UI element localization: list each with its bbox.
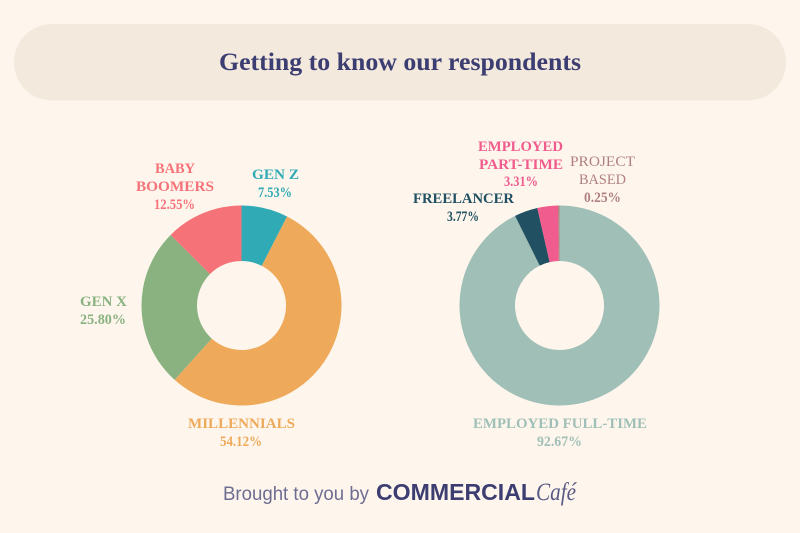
label: Freelancer xyxy=(413,191,514,225)
label: Employed part-time xyxy=(478,139,563,190)
label: Employed full-time: EMPLOYED FULL-TIME xyxy=(473,416,647,432)
donut chart: employment xyxy=(459,205,659,406)
logo: CommercialCafé: COMMERCIAL xyxy=(376,479,535,505)
label: Employed full-time xyxy=(473,416,647,450)
slice: Baby Boomers xyxy=(171,206,242,274)
label: Employed part-time: 3.31% xyxy=(504,174,538,190)
label: Baby Boomers: BOOMERS xyxy=(136,179,214,195)
title banner xyxy=(14,24,786,100)
label: Project based: 0.25% xyxy=(584,190,621,206)
label: Millennials xyxy=(188,416,295,450)
slice: Freelancer xyxy=(515,208,550,266)
label: Gen Z: 7.53% xyxy=(258,185,292,201)
label: Employed part-time: PART-TIME xyxy=(479,157,563,173)
label: Baby Boomers: 12.55% xyxy=(154,197,195,213)
slice: Gen X xyxy=(142,235,212,380)
label: Gen Z: GEN Z xyxy=(252,167,299,183)
label: Gen X: GEN X xyxy=(80,294,127,310)
slice: Employed full-time xyxy=(459,206,659,406)
donut chart: generations xyxy=(142,206,342,406)
slice: Employed part-time xyxy=(537,206,559,262)
label: Gen Z xyxy=(252,167,299,201)
footer credit xyxy=(223,479,577,506)
title banner: Getting to know our respondents xyxy=(219,47,581,76)
label: Project based: PROJECT xyxy=(570,154,635,170)
footer credit: Brought to you by xyxy=(223,484,369,505)
label: Employed part-time: EMPLOYED xyxy=(478,139,563,155)
label: Baby Boomers: BABY xyxy=(155,161,195,177)
label: Millennials: MILLENNIALS xyxy=(188,416,295,432)
logo: CommercialCafé: Café xyxy=(536,479,577,506)
slice: Project based xyxy=(558,205,560,261)
label: Freelancer: 3.77% xyxy=(447,209,479,225)
label: Baby Boomers xyxy=(136,161,214,213)
slice: Gen Z xyxy=(242,206,287,266)
label: Freelancer: FREELANCER xyxy=(413,191,514,207)
label: Project based: BASED xyxy=(579,172,626,188)
label: Employed full-time: 92.67% xyxy=(537,434,582,450)
label: Gen X: 25.80% xyxy=(80,312,126,328)
label: Project based xyxy=(570,154,635,206)
label: Millennials: 54.12% xyxy=(220,434,262,450)
slice: Millennials xyxy=(175,216,342,406)
label: Gen X xyxy=(80,294,127,328)
